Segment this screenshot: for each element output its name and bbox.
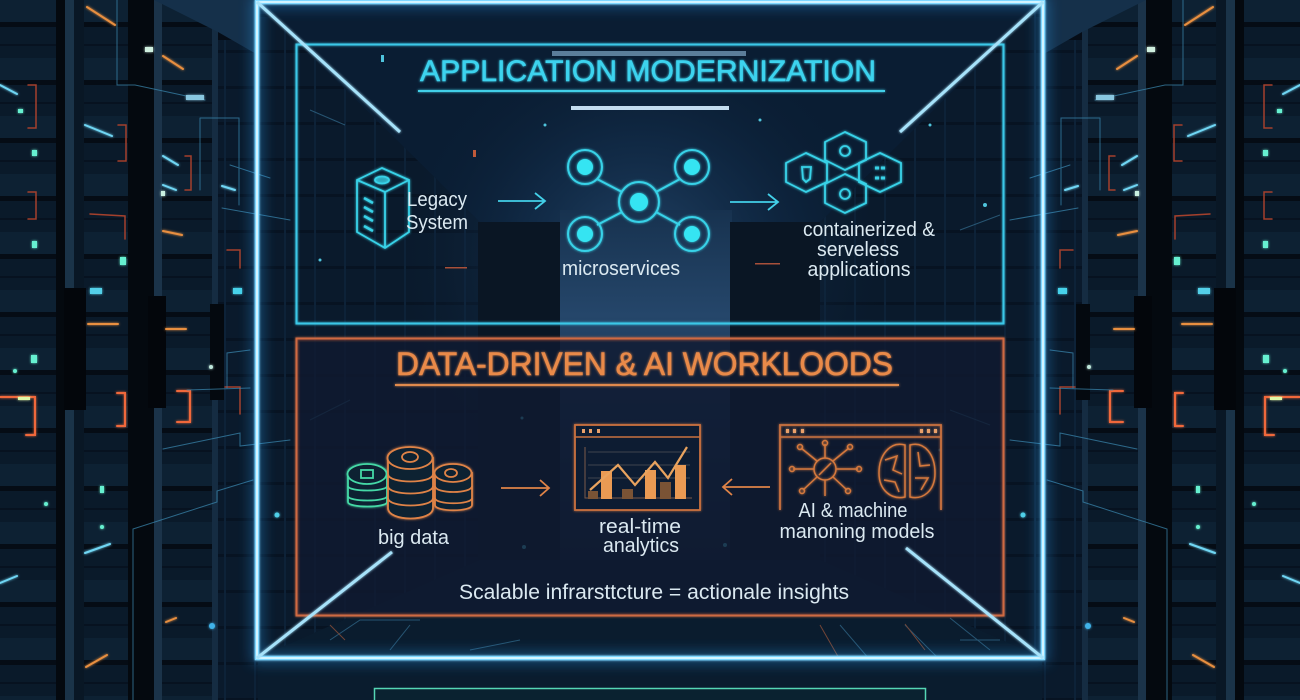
label: containerized and serverless applications: containerized &	[803, 219, 936, 241]
perspective edges of the frame	[257, 2, 1043, 658]
outer glowing frame	[257, 2, 1043, 658]
label: containerized and serverless applications	[803, 219, 936, 281]
label: legacy system: Legacy	[407, 189, 467, 211]
panel: bottom teal box (cropped)	[374, 688, 926, 700]
arrow: AI models to analytics	[723, 479, 770, 495]
icon: microservices network	[568, 150, 709, 251]
label: legacy system: System	[406, 212, 468, 234]
label: legacy system	[406, 189, 468, 234]
label: AI and machine learning models: manoning models	[780, 521, 934, 543]
arrow: big data to analytics	[501, 480, 549, 496]
server racks: right	[1010, 0, 1300, 700]
caption: scalable infrastructure: Scalable infrarsttcture = actionale insights	[459, 581, 849, 604]
light bars	[552, 51, 746, 110]
circuit traces and data sparks	[310, 55, 1000, 660]
heading: application modernization: APPLICATION MODERNIZATION	[420, 55, 876, 88]
label: real-time analytics: real-time	[599, 516, 681, 538]
icon: legacy server	[357, 168, 409, 248]
label: containerized and serverless applications: serveless	[817, 239, 899, 261]
heading: data-driven and AI workloads: DATA-DRIVEN & AI WORKLOODS	[396, 346, 893, 382]
server racks: left	[0, 0, 290, 700]
panel: data-driven and AI workloads	[296, 338, 1004, 616]
label: real-time analytics: analytics	[603, 535, 679, 557]
label: containerized and serverless applications: applications	[808, 259, 910, 281]
label: big data: big data	[378, 527, 450, 549]
label: microservices: microservices	[562, 258, 680, 280]
icon: big data cylinders	[348, 447, 472, 518]
label: real-time analytics	[599, 516, 681, 557]
label: AI and machine learning models	[780, 500, 934, 543]
arrow: legacy to microservices	[498, 193, 545, 209]
panel: application modernization	[296, 44, 1004, 324]
icon: analytics chart window	[575, 425, 700, 510]
icon: AI window with neural network and brain	[780, 425, 941, 510]
icon: container hexagons	[786, 132, 901, 213]
label: AI and machine learning models: AI & machine	[798, 500, 908, 522]
arrow: microservices to containers	[730, 194, 778, 210]
